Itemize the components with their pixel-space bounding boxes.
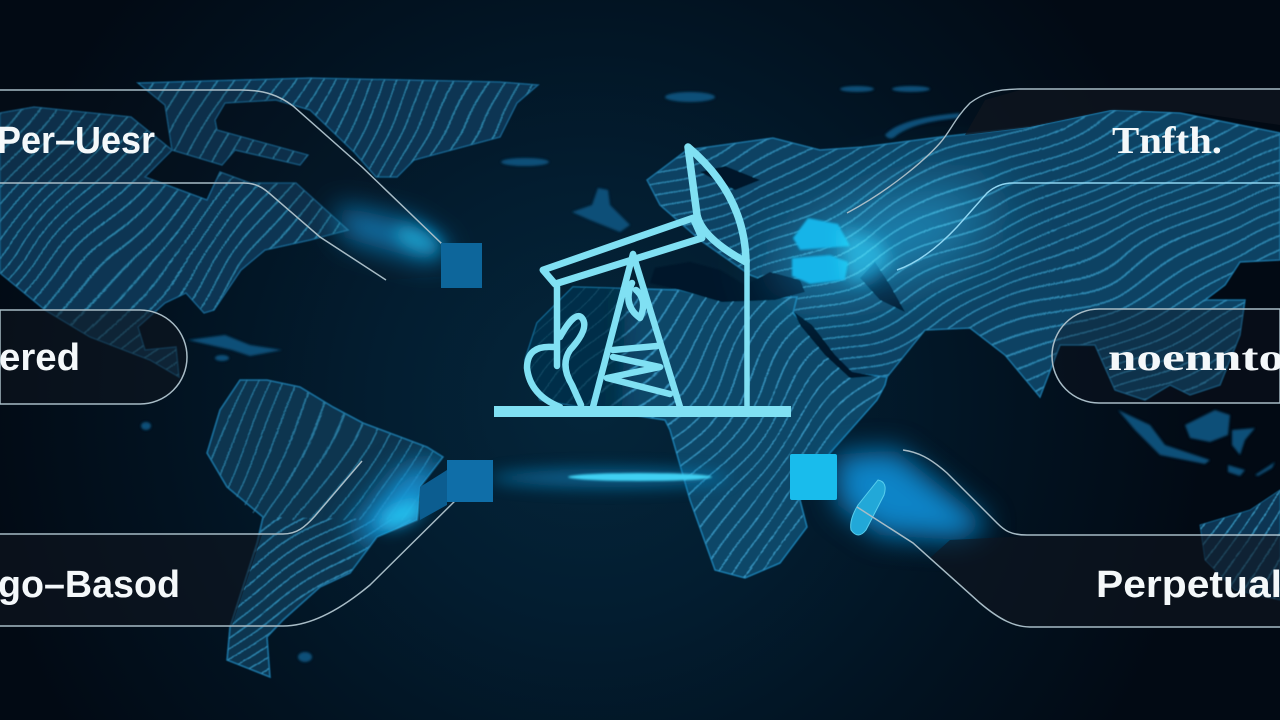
connector node: lower right (790, 454, 837, 500)
shade: western Africa fade (524, 286, 640, 406)
icon: pitman arm and hose (527, 287, 584, 407)
panel: Tiered (0, 310, 187, 404)
icon: ground line (494, 406, 791, 417)
islands (141, 86, 1275, 662)
panel: Per-User (0, 90, 465, 280)
panel: Perpetual (857, 450, 1280, 627)
continent: Greenland and Arctic islands (136, 76, 540, 178)
icon: walking beam (543, 218, 702, 284)
sea: Red Sea (794, 312, 875, 378)
glow: beam upper left (335, 205, 450, 262)
panel: Usage-Based (0, 461, 463, 626)
sea: Mediterranean and Black Sea (650, 166, 905, 312)
label: Middle right: noennto (1108, 337, 1280, 379)
label: Usage-Based: go–Basod (0, 564, 180, 606)
icon: derrick tower (593, 254, 680, 407)
icon: horse head (688, 147, 746, 262)
label: Top right: Tnfth. (1112, 120, 1222, 162)
continent: Africa (524, 286, 888, 580)
continent: Eurasia (646, 109, 1280, 402)
icon: polished rod (744, 260, 750, 407)
glow: Eurasia highlight (763, 166, 1007, 314)
glow: centre light bar (490, 469, 730, 487)
connector node: lower left (447, 460, 493, 502)
panel: Top right (847, 89, 1280, 270)
continent: Australia (1180, 470, 1280, 610)
glow: lower right beam (835, 450, 990, 540)
continent: North America (0, 106, 350, 378)
continent: South America (206, 378, 444, 678)
label: Per-User: Per–Uesr (0, 120, 155, 162)
label: Perpetual: Perpetual (1096, 564, 1280, 606)
connector node: upper left (441, 243, 482, 288)
oil pumpjack icon (494, 147, 791, 417)
panel: Middle right (1052, 309, 1280, 403)
glow: South America (350, 460, 447, 545)
island: Madagascar (851, 480, 885, 535)
label: Tiered: ered (0, 337, 80, 379)
